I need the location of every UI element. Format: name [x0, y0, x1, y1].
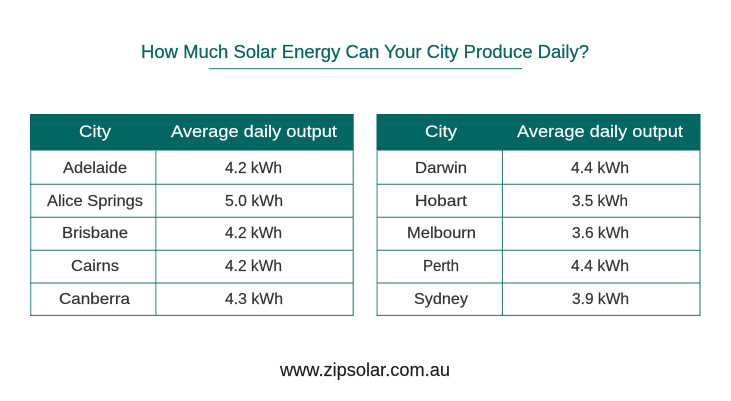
left table rows: Canberra [59, 291, 130, 308]
website footer: www.zipsolar.com.au [279, 360, 450, 380]
left table header: City [79, 123, 112, 141]
left table rows: 4.2 kWh [225, 225, 282, 242]
left table grid [30, 150, 354, 316]
left table rows: 4.3 kWh [225, 291, 283, 308]
right table rows: Darwin [415, 160, 467, 177]
right table rows: 4.4 kWh [571, 160, 629, 177]
left table rows: Cairns [71, 258, 119, 275]
left table rows [47, 160, 283, 308]
right table rows: Hobart [415, 193, 468, 210]
left table rows: Alice Springs [47, 193, 143, 210]
left table header [30, 114, 354, 150]
left table rows: 4.2 kWh [225, 258, 282, 275]
right table header: Average daily output [517, 123, 683, 141]
right table rows: 3.9 kWh [572, 291, 629, 308]
right table rows: 4.4 kWh [571, 258, 629, 275]
right table rows: Sydney [414, 291, 468, 308]
right table grid [376, 150, 700, 316]
right table rows: Melbourn [407, 225, 476, 242]
left table rows: 4.2 kWh [225, 160, 282, 177]
right table rows [407, 160, 629, 308]
left table [30, 114, 354, 316]
left table rows: Adelaide [63, 160, 127, 177]
left table rows: 5.0 kWh [225, 193, 283, 210]
right table [376, 114, 700, 316]
right table rows: 3.6 kWh [572, 225, 629, 242]
right table header: City [425, 123, 458, 141]
title: How Much Solar Energy Can Your City Produce Daily? [141, 41, 589, 62]
left table header: Average daily output [171, 123, 337, 141]
title underline [209, 68, 522, 69]
left table rows: Brisbane [62, 225, 128, 242]
right table header [376, 114, 700, 150]
right table rows: 3.5 kWh [572, 193, 628, 210]
right table rows: Perth [423, 258, 459, 275]
